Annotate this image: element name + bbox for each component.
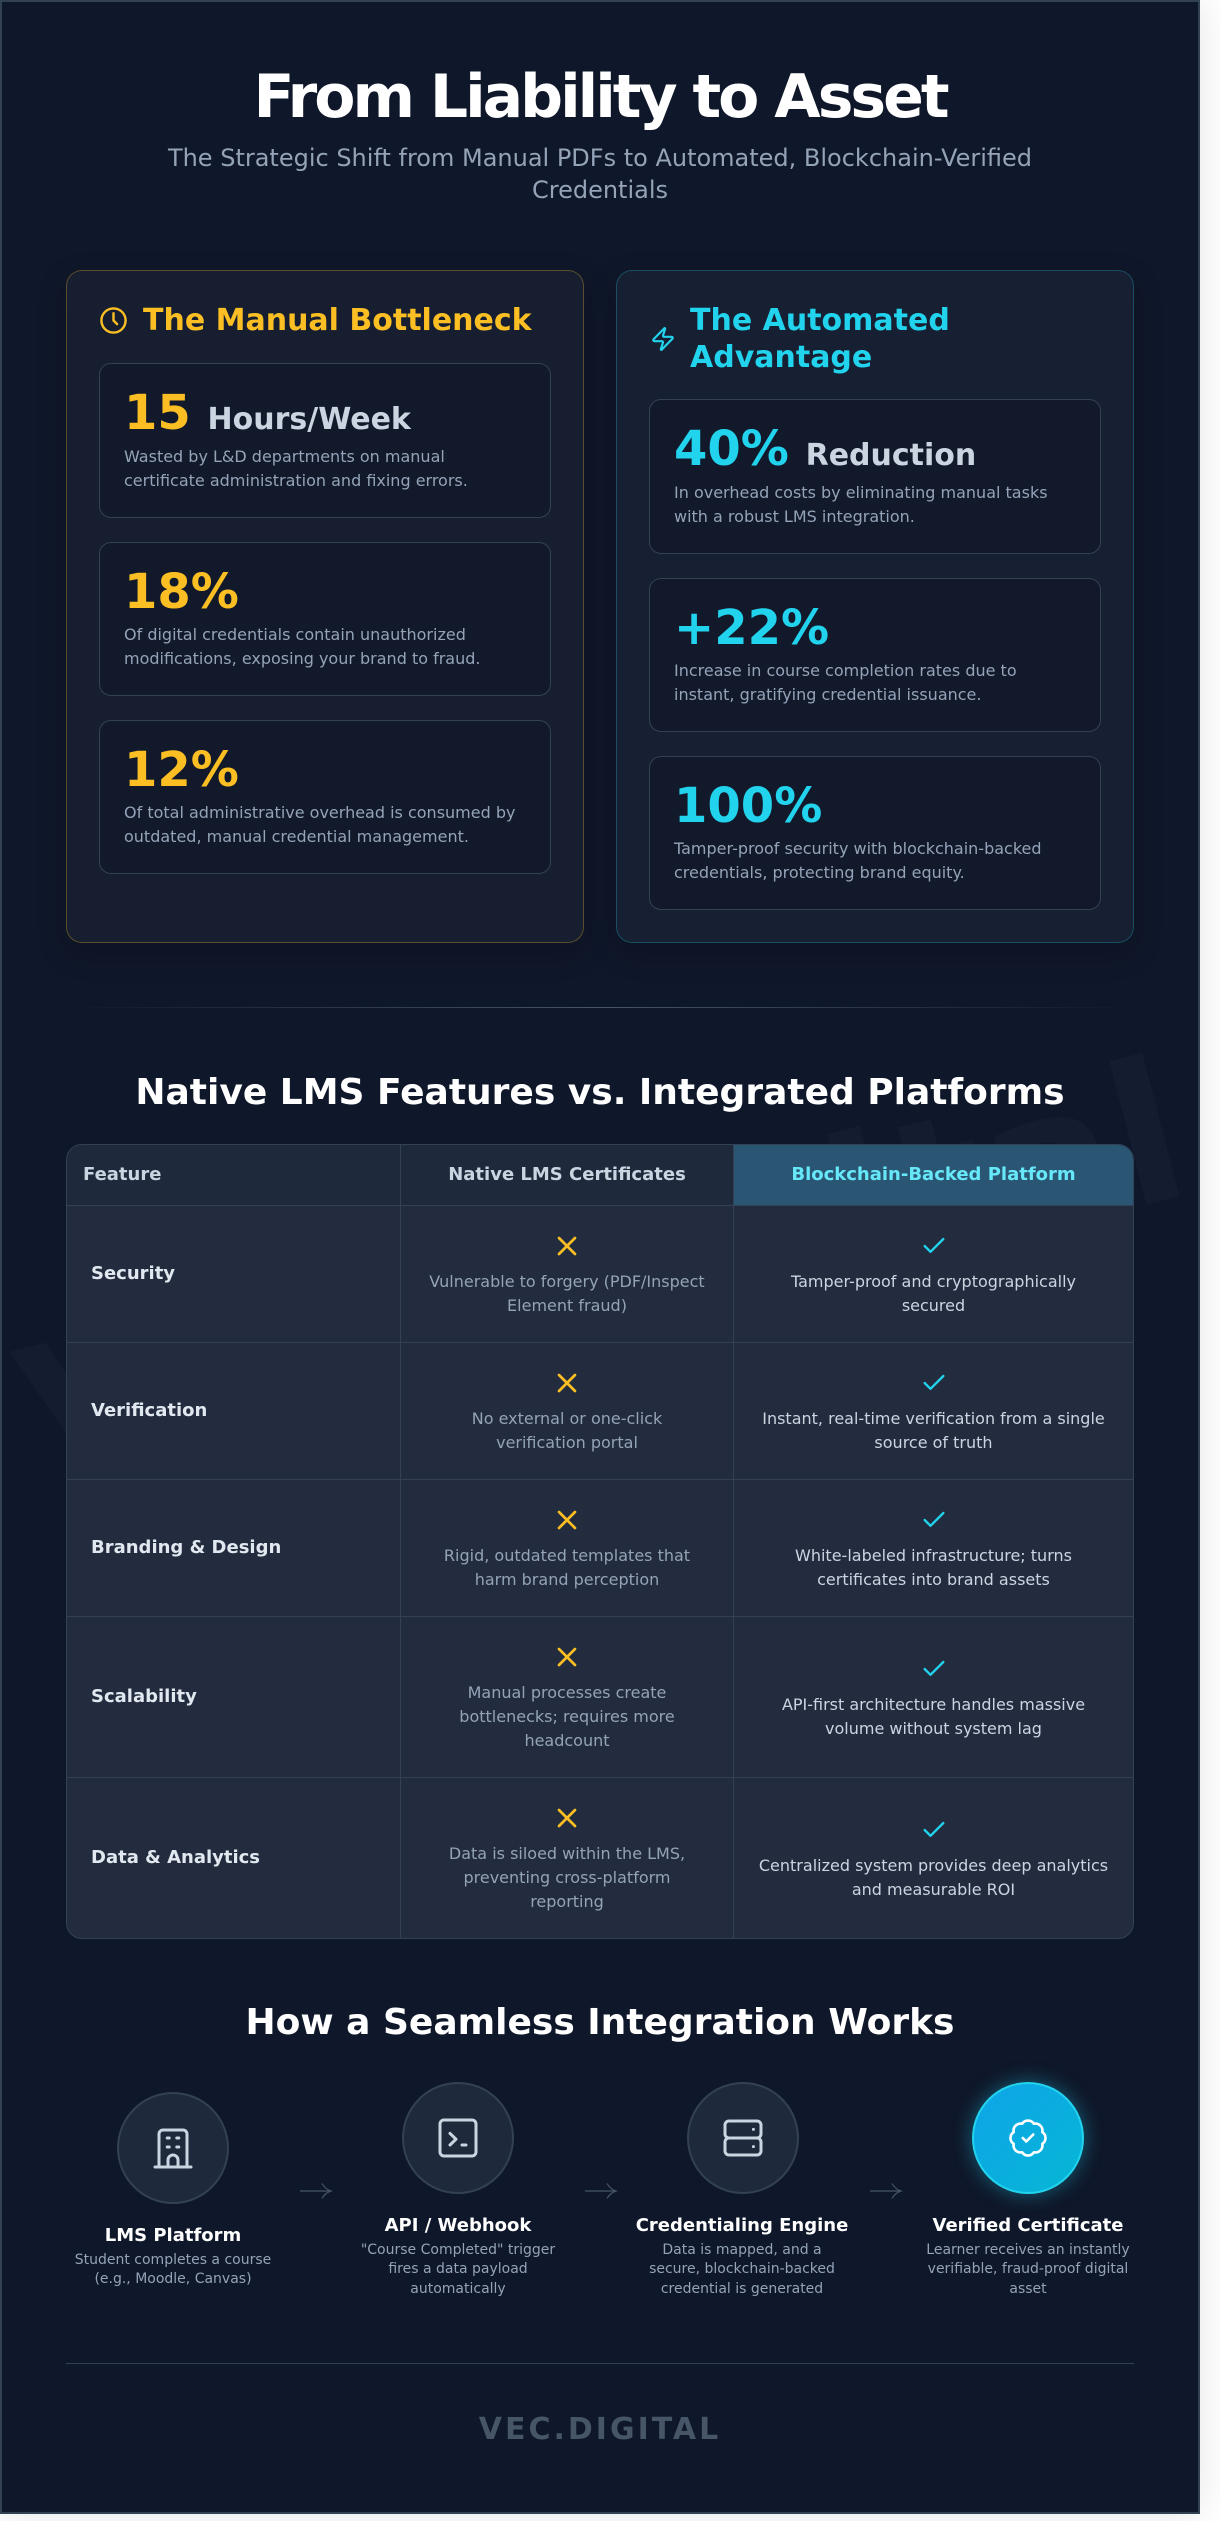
row: data and analytics: Data is siloed within the LMS, — [449, 1844, 685, 1863]
step: verified certificate: asset — [1009, 2281, 1047, 2297]
row: security: Security — [91, 1263, 175, 1284]
stat: 100 percent: 100% — [674, 778, 822, 834]
stat: 18 percent: modifications, exposing your brand to fraud. — [124, 649, 480, 668]
row: scalability: volume without system lag — [825, 1719, 1042, 1738]
stat: 18 percent — [99, 542, 551, 696]
arrow — [870, 2183, 902, 2199]
row: scalability — [67, 1617, 1133, 1778]
stat: 12 percent: Of total administrative overhead is consumed by — [124, 803, 515, 822]
step: verified certificate: Verified Certificate — [933, 2215, 1123, 2236]
row: data and analytics: reporting — [530, 1892, 604, 1911]
step: LMS platform: (e.g., Moodle, Canvas) — [94, 2271, 252, 2287]
watermark: Vec.Digital — [0, 1017, 1200, 1534]
row: verification: source of truth — [874, 1433, 993, 1452]
stat: plus 22 percent — [649, 578, 1101, 732]
step: API webhook — [361, 2215, 556, 2297]
stat: 12 percent — [99, 720, 551, 874]
row: security: Element fraud) — [507, 1296, 627, 1315]
row: security: secured — [902, 1296, 965, 1315]
row: security: Vulnerable to forgery (PDF/Inspect — [429, 1272, 705, 1291]
step: credentialing engine — [636, 2215, 848, 2297]
row: branding and design: certificates into brand assets — [817, 1570, 1050, 1589]
icon: credentialing engine — [687, 2082, 799, 2194]
heading: automated advantage: Advantage — [690, 340, 872, 375]
stat: 18 percent: Of digital credentials contain unauthorized — [124, 625, 466, 644]
row: scalability: Scalability — [91, 1686, 197, 1707]
subtitle: The Strategic Shift from Manual PDFs to Automated, Blockchain-Verified — [168, 144, 1032, 172]
stat: plus 22 percent: +22% — [674, 600, 829, 656]
panel: manual bottleneck — [66, 270, 584, 943]
step: API webhook: automatically — [410, 2281, 506, 2297]
table header: Native LMS Certificates — [448, 1164, 686, 1185]
step: API webhook: API / Webhook — [385, 2215, 531, 2236]
stat: plus 22 percent: instant, gratifying credential issuance. — [674, 685, 981, 704]
stat: 15 hours per week: certificate administration and fixing errors. — [124, 471, 468, 490]
row: verification: No external or one-click — [472, 1409, 662, 1428]
stat: 12 percent: outdated, manual credential management. — [124, 827, 469, 846]
heading: integration: How a Seamless Integration Works — [246, 2002, 954, 2043]
row: verification: Instant, real-time verification from a single — [762, 1409, 1105, 1428]
row: branding and design: Rigid, outdated templates that — [444, 1546, 690, 1565]
subtitle: Credentials — [532, 176, 668, 204]
step: API webhook: fires a data payload — [388, 2261, 528, 2277]
stat: 40 percent reduction: with a robust LMS integration. — [674, 507, 915, 526]
table header — [67, 1145, 1133, 1206]
step: verified certificate — [926, 2215, 1130, 2297]
row: data and analytics: preventing cross-platform — [463, 1868, 671, 1887]
table header: Feature — [83, 1164, 161, 1185]
stat: 12 percent: 12% — [124, 742, 239, 798]
step: LMS platform: LMS Platform — [105, 2225, 241, 2246]
heading: automated advantage — [652, 303, 950, 375]
step: LMS platform: Student completes a course — [75, 2252, 271, 2268]
row: scalability: API-first architecture handles massive — [782, 1695, 1085, 1714]
arrow — [585, 2183, 618, 2199]
stat: plus 22 percent: Increase in course completion rates due to — [674, 661, 1017, 680]
row: security — [67, 1206, 1133, 1343]
step: credentialing engine: credential is generated — [661, 2281, 823, 2297]
footer brand: VEC.DIGITAL — [479, 2412, 721, 2447]
row: data and analytics — [91, 1778, 1108, 1938]
panel: automated advantage — [616, 270, 1134, 943]
stat: 40 percent reduction — [649, 399, 1101, 554]
stat: 15 hours per week — [99, 363, 551, 518]
row: verification — [67, 1343, 1133, 1480]
icon: API webhook — [402, 2082, 514, 2194]
row: branding and design: harm brand perception — [475, 1570, 659, 1589]
step: verified certificate: verifiable, fraud-proof digital — [928, 2261, 1128, 2277]
step: verified certificate: Learner receives an instantly — [926, 2242, 1130, 2258]
stat: 100 percent: Tamper-proof security with blockchain-backed — [674, 839, 1042, 858]
row: data and analytics: and measurable ROI — [852, 1880, 1015, 1899]
step: credentialing engine: secure, blockchain-backed — [649, 2261, 835, 2277]
row: branding and design — [67, 1480, 1133, 1617]
icon: verified certificate — [972, 2082, 1084, 2194]
heading: automated advantage: The Automated — [690, 303, 950, 338]
stat: 15 hours per week: 15 Hours/Week — [124, 385, 411, 441]
stat: 100 percent: credentials, protecting brand equity. — [674, 863, 965, 882]
step: credentialing engine: Data is mapped, and a — [662, 2242, 822, 2258]
stat: 15 hours per week: Wasted by L&D departments on manual — [124, 447, 445, 466]
comparison table — [66, 1144, 1134, 1939]
table header: Blockchain-Backed Platform — [791, 1164, 1076, 1185]
heading: comparison: Native LMS Features vs. Integrated Platforms — [135, 1072, 1065, 1113]
stat: 40 percent reduction: 40% Reduction — [674, 421, 976, 477]
icon: LMS platform — [117, 2092, 229, 2204]
row: data and analytics: Data & Analytics — [91, 1847, 260, 1868]
row: data and analytics: Centralized system provides deep analytics — [759, 1856, 1108, 1875]
step: API webhook: "Course Completed" trigger — [361, 2242, 555, 2258]
subtitle — [168, 144, 1032, 204]
step: LMS platform — [75, 2225, 271, 2287]
stat: 18 percent: 18% — [124, 564, 239, 620]
arrow — [300, 2183, 332, 2199]
row: verification: verification portal — [496, 1433, 638, 1452]
row: security: Tamper-proof and cryptographically — [791, 1272, 1076, 1291]
row: verification: Verification — [91, 1400, 207, 1421]
row: branding and design: White-labeled infrastructure; turns — [795, 1546, 1072, 1565]
heading: manual bottleneck: The Manual Bottleneck — [143, 303, 532, 338]
row: scalability: Manual processes create — [468, 1683, 666, 1702]
row: branding and design: Branding & Design — [91, 1537, 281, 1558]
row: scalability: headcount — [524, 1731, 610, 1750]
stat: 100 percent — [649, 756, 1101, 910]
step: credentialing engine: Credentialing Engine — [636, 2215, 848, 2236]
row: scalability: bottlenecks; requires more — [459, 1707, 675, 1726]
title: From Liability to Asset — [253, 62, 946, 132]
stat: 40 percent reduction: In overhead costs by eliminating manual tasks — [674, 483, 1048, 502]
